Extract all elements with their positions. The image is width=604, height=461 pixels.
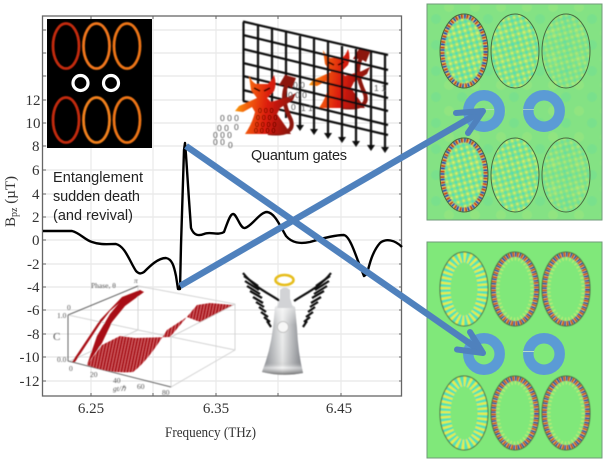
resonator ellipses: [440, 252, 590, 450]
ellipse outlines: [440, 14, 590, 212]
digits inside grid: 1 1: [301, 103, 313, 113]
label: entanglement sudden death: [53, 170, 143, 224]
label: quantum gates: Quantum gates: [251, 148, 347, 164]
x axis tick labels: 6.45: [326, 401, 352, 417]
digits inside grid: 0 0: [293, 80, 305, 90]
gate grid: [243, 22, 388, 150]
inset labels: 20: [90, 370, 98, 379]
inner pale stripes of strong ellipses: [497, 258, 584, 444]
y axis tick labels: -4: [27, 280, 40, 296]
inset labels: 60: [137, 382, 145, 391]
label: entanglement sudden death: (and revival): [53, 208, 133, 224]
inset: 3D concurrence surface: [53, 276, 235, 397]
arrow: from dip to top panel: [180, 111, 483, 286]
digits on demon body: 0 0 0 0: [254, 128, 276, 135]
label: entanglement sudden death: Entanglement: [53, 170, 143, 186]
strong rim stripes: [442, 16, 486, 210]
x axis tick labels: 6.25: [78, 401, 104, 417]
strong ellipses rim colour: [494, 254, 588, 448]
interior interference: [440, 14, 590, 212]
right wing: [294, 273, 331, 327]
inset labels: gt/ℏ: [113, 384, 127, 393]
pale left ellipses: [446, 258, 482, 444]
digits inside grid: 0 0 0: [288, 90, 307, 100]
y axis tick labels: -12: [20, 374, 40, 390]
x axis tick labels: [78, 401, 352, 417]
chart: Bpz vs frequency: [3, 16, 402, 441]
y axis tick labels: 10: [26, 116, 40, 132]
robe: [262, 304, 303, 375]
inset labels: 0: [69, 364, 73, 373]
label: entanglement sudden death: sudden death: [53, 189, 140, 205]
y axis tick labels: -6: [27, 303, 40, 319]
y axis tick labels: 0: [32, 233, 40, 249]
glowing ellipses: [53, 24, 140, 142]
grid arrowheads: [296, 125, 389, 153]
y axis tick labels: -2: [27, 257, 40, 273]
digits on demon body: [254, 108, 278, 135]
halo: [276, 275, 294, 285]
y axis title: B: [3, 217, 19, 227]
x axis tick labels: 6.35: [203, 401, 229, 417]
y axis tick labels: 4: [32, 187, 40, 203]
arrow: from peak to bottom panel: [186, 146, 483, 353]
grid lines: [43, 16, 402, 396]
inset labels: 1.0: [57, 311, 67, 320]
digits inside grid: 1 1: [374, 83, 386, 93]
inset labels: 40: [113, 376, 121, 385]
head: [277, 288, 293, 308]
3D box axes: [68, 286, 235, 387]
plot frame and ticks: [42, 16, 402, 396]
rear demon: [309, 49, 370, 108]
illustration: demons at quantum gate grid: [213, 22, 389, 153]
surface second band: [87, 290, 144, 365]
ellipse outlines: [440, 252, 590, 450]
inset: ring and ellipse intensity image: [47, 19, 152, 148]
strong ellipses red stripes: [494, 254, 588, 448]
y axis tick labels: 8: [32, 139, 40, 155]
digits inside grid: [288, 80, 386, 113]
split rings: [468, 95, 560, 127]
mottled field: [428, 5, 601, 219]
split rings: [468, 338, 560, 370]
inset labels: C: [53, 331, 60, 343]
digits inside grid: 0: [291, 102, 296, 112]
white rings: [73, 76, 118, 90]
inset labels: 0: [67, 303, 71, 312]
digits on demon body: 0 0 0: [258, 108, 274, 115]
loose digits: 0 0 0: [213, 130, 232, 140]
loose digits: 0 0: [213, 137, 225, 147]
y axis title: pz: [9, 207, 20, 217]
resonator ellipses: [440, 14, 590, 212]
strong ellipses blue stripes: [494, 254, 588, 448]
y axis tick labels: [20, 93, 40, 390]
inset labels: 80: [162, 388, 170, 397]
y axis tick labels: 6: [32, 163, 40, 179]
ring gaps: [474, 108, 534, 110]
loose digits: 0 0: [217, 123, 229, 133]
y axis title: (µT): [3, 176, 19, 208]
front demon: [235, 75, 296, 134]
loose digits: 0 0 0: [220, 113, 239, 123]
inset labels: 0.0: [57, 355, 67, 364]
loose digits: 0: [234, 122, 239, 132]
data curve: [43, 143, 402, 289]
robe shading: [262, 304, 303, 375]
surface ribbon: [72, 290, 143, 362]
digits on demon body: 0 0 0 0: [256, 115, 278, 122]
panel: top field map: [427, 4, 602, 220]
illustration: angel: [243, 273, 331, 375]
panel background: [427, 4, 602, 220]
panel: bottom field map: [427, 242, 602, 458]
y axis tick labels: 2: [32, 210, 40, 226]
loose digits: 0: [228, 140, 233, 150]
ring gap: [523, 350, 534, 352]
y axis tick labels: -10: [20, 350, 40, 366]
digits on demon body: 0 0 0 0: [255, 122, 277, 129]
surface main: [87, 303, 233, 372]
inset labels: [53, 276, 170, 397]
orb: [278, 322, 288, 332]
y axis tick labels: -8: [27, 327, 40, 343]
inset labels: π: [134, 276, 138, 285]
x axis title: Frequency (THz): [165, 425, 256, 441]
loose digits: [213, 113, 239, 150]
panel background: [427, 242, 602, 458]
y axis tick labels: 12: [26, 93, 40, 109]
black background: [47, 19, 152, 148]
left wing: [243, 273, 280, 327]
inset labels: Phase, θ: [91, 281, 116, 290]
